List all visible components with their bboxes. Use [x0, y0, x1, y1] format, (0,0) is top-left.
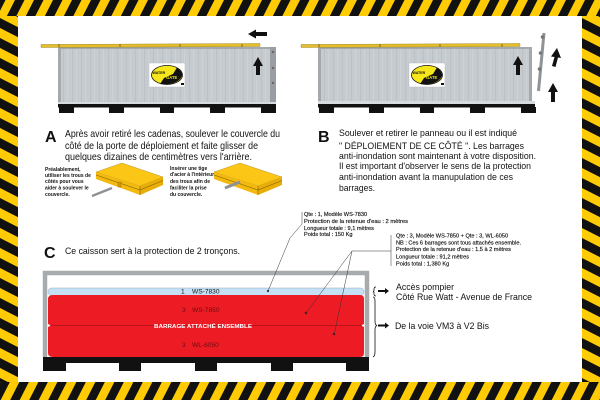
container A body	[58, 47, 276, 113]
step A text: côté de la porte de déploiement et faite glisser de	[65, 141, 258, 152]
step A text	[65, 129, 280, 163]
step A text: quelques dizaines de centimètres vers l'arrière.	[65, 152, 252, 163]
barrier WS-7850: 3	[182, 342, 186, 349]
barrier WS-7830: WS-7830	[192, 288, 220, 296]
spec note: WS-7850 and WL-6050	[396, 234, 521, 268]
lid A	[41, 44, 260, 48]
access label: Côté Rue Watt - Avenue de France	[396, 291, 532, 302]
small note left: côtés pour vous	[45, 179, 84, 185]
small note right: des trous afin de	[170, 179, 210, 185]
step B text: anti-inondation avant la manupulation de ces	[339, 171, 513, 182]
route label: De la voie VM3 à V2 Bis	[395, 320, 489, 331]
barrier WS-7850: 3	[182, 307, 186, 314]
step B text: barrages.	[339, 182, 375, 193]
box illustration right	[214, 163, 282, 195]
access label: Accès pompier	[396, 281, 454, 292]
barrier label: BARRAGE ATTACHÉ ENSEMBLE	[154, 322, 252, 330]
spec note: WS-7830: Qte : 1, Modèle WS-7830	[304, 212, 367, 218]
step B text: Il est important d'observer le sens de la protection	[339, 160, 531, 171]
box illustration left	[92, 163, 163, 196]
small note right: Insérer une tige	[170, 166, 207, 172]
step B text: anti-inondation sont maintenant à votre disposition.	[339, 150, 536, 161]
small note left	[45, 167, 91, 198]
step C text: Ce caisson sert à la protection de 2 tronçons.	[65, 245, 240, 256]
arrow to route label	[378, 322, 389, 328]
small note left: Préalablement,	[45, 167, 81, 173]
small note left: couvercle.	[45, 192, 70, 198]
step B heading letter: B	[318, 129, 330, 146]
step A heading letter: A	[45, 129, 57, 146]
spec note: WS-7830: Longueur totale : 9,1 mètres	[304, 226, 374, 232]
barrier WS-7850: WS-7850	[192, 307, 220, 314]
small note right: d'acier à l'intérieur	[170, 172, 214, 178]
spec note: WS-7830: Protection de la retenue d'eau : 2 mètres	[304, 219, 408, 225]
diagram: container A with lid sliding	[41, 30, 276, 113]
barrier WS-7850	[48, 295, 364, 357]
small note left: utiliser les trous de	[45, 173, 91, 179]
step B text: Soulever et retirer le panneau ou il est indiqué	[339, 127, 517, 138]
arrow up B	[513, 56, 523, 75]
spec note: WS-7850 and WL-6050: Qte : 3, Modèle WS-7850 + Qte : 3, WL-6050	[396, 234, 508, 240]
step C heading letter: C	[44, 245, 56, 262]
step B text	[339, 127, 536, 193]
spec note: WS-7830	[304, 212, 408, 238]
small note right	[170, 166, 214, 198]
logo B	[409, 63, 445, 87]
barrier WS-7850: WL-6050	[192, 342, 219, 349]
arrow up	[253, 57, 263, 75]
spec note: WS-7830: Poids total : 150 Kg	[304, 232, 353, 238]
removed side panel	[538, 33, 544, 91]
arrow left	[248, 30, 267, 38]
lid B	[301, 44, 520, 48]
arrow to access label	[378, 288, 389, 294]
access label	[396, 281, 532, 302]
spec note: WS-7850 and WL-6050: Protection de la retenue d'eau : 1.5 à 2 mètres	[396, 247, 511, 253]
small note right: faciliter la prise	[170, 186, 207, 192]
small note right: du couvercle.	[170, 192, 203, 198]
diagram: container B with panel removed	[301, 33, 561, 113]
pallet	[43, 357, 369, 371]
container B body	[318, 47, 536, 113]
logo A	[149, 63, 185, 87]
slanted arrow up	[551, 48, 561, 67]
step A text: Après avoir retiré les cadenas, soulever le couvercle du	[65, 129, 280, 140]
spec note: WS-7850 and WL-6050: Longueur totale : 91,2 mètres	[396, 254, 469, 260]
leader lines	[267, 212, 391, 335]
barrier WS-7830	[48, 288, 364, 296]
braces	[373, 287, 377, 357]
step B text: " DÉPLOIEMENT DE CE CÔTÉ ". Les barrages	[339, 140, 524, 151]
lower arrow up	[548, 83, 558, 102]
barrier WS-7830: 1	[181, 288, 185, 296]
spec note: WS-7850 and WL-6050: NB : Ces 6 barrages sont tous attachés ensemble.	[396, 240, 521, 246]
small note left: aider à soulever le	[45, 186, 89, 192]
spec note: WS-7850 and WL-6050: Poids total : 1,380 Kg	[396, 262, 449, 268]
diagram: container cross-section with barriers	[43, 273, 369, 371]
container frame	[45, 273, 367, 357]
